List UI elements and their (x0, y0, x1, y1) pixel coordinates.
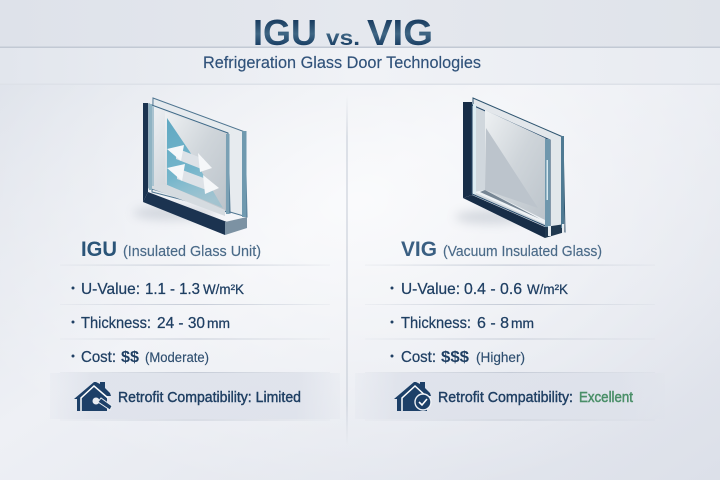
title band (0, 0, 720, 85)
icon: airflow arrows (167, 145, 219, 194)
spec: thickness (72, 315, 230, 332)
retrofit: VIG (355, 373, 665, 419)
title (253, 12, 433, 53)
icon: IGU glass unit (133, 98, 247, 235)
retrofit: VIG: Excellent (579, 390, 633, 406)
spec: U-value: W/m²K (203, 282, 244, 297)
heading: VIG (401, 238, 602, 261)
spec: cost: (Moderate) (145, 350, 209, 365)
icon: VIG glass unit (455, 98, 565, 238)
spec: U-value (390, 281, 568, 298)
heading: IGU (81, 238, 261, 261)
icon: house with wrench (74, 382, 112, 411)
spec: thickness: 6 - 8 (477, 315, 509, 332)
spec: U-value: 0.4 - 0.6 (464, 281, 522, 298)
spec: cost (72, 349, 209, 366)
spec: thickness: Thickness: (401, 315, 471, 332)
spec: U-value: 1.1 - 1.3 (145, 281, 200, 298)
spec: cost: (Higher) (476, 350, 525, 365)
heading: IGU: (Insulated Glass Unit) (123, 244, 261, 260)
spec: U-value: U-Value: (81, 281, 140, 298)
heading: VIG: (Vacuum Insulated Glass) (443, 244, 602, 260)
spec: cost (390, 349, 525, 366)
spec: thickness: mm (207, 315, 230, 331)
heading: VIG: VIG (401, 238, 437, 261)
panel: VIG (355, 98, 665, 420)
spec: thickness: 24 - 30 (157, 315, 205, 332)
center divider (346, 95, 348, 445)
subtitle: Refrigeration Glass Door Technologies (203, 54, 481, 72)
spec: thickness: mm (511, 315, 534, 331)
spec: U-value: W/m²K (527, 282, 568, 297)
spec: U-value: U-Value: (401, 281, 460, 298)
icon: house with check (394, 382, 431, 411)
spec: thickness (390, 315, 534, 332)
retrofit: VIG: Retrofit Compatibility: (438, 390, 573, 406)
spec: cost: $$$ (441, 349, 469, 366)
spec: cost: Cost: (81, 349, 116, 366)
heading: IGU: IGU (81, 238, 117, 261)
spec: U-value (72, 281, 244, 298)
spec: cost: $$ (121, 349, 139, 366)
title: IGU (253, 12, 317, 53)
title: VIG (367, 12, 433, 53)
spec: cost: Cost: (401, 349, 436, 366)
title: vs. (326, 27, 360, 50)
panel: IGU (50, 98, 340, 420)
retrofit: IGU (50, 373, 340, 419)
spec: thickness: Thickness: (81, 315, 151, 332)
retrofit: IGU: Retrofit Compatibility: Limited (118, 390, 301, 406)
